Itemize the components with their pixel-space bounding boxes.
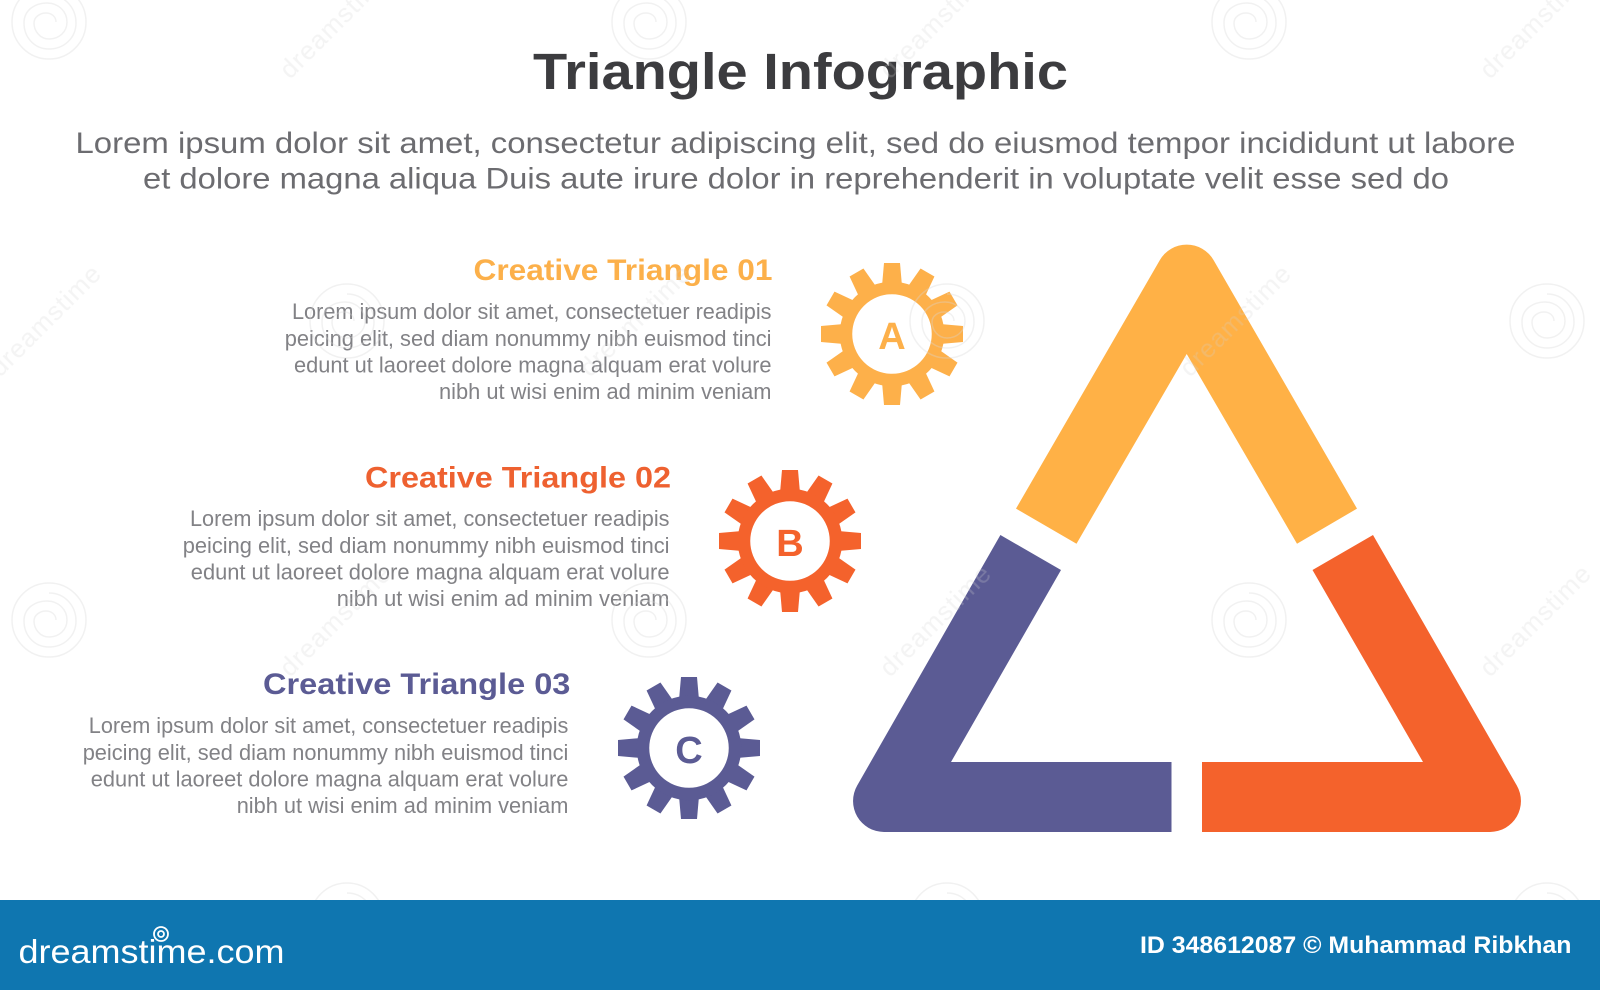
text block: creative triangle 03: Creative Triangle 03 (263, 668, 570, 701)
text block: creative triangle 03: edunt ut laoreet dolore magna alquam erat volure (91, 766, 568, 792)
text block: creative triangle 02 (183, 462, 671, 611)
subtitle text block: et dolore magna aliqua Duis aute irure dolor in reprehenderit in voluptate velit esse sed do (143, 162, 1449, 196)
text block: creative triangle 03: Lorem ipsum dolor sit amet, consectetuer readipis (89, 713, 568, 738)
text block: creative triangle 01: peicing elit, sed diam nonummy nibh euismod tinci (285, 326, 772, 351)
icon: gear C (618, 677, 760, 819)
text: dreamstime (573, 258, 697, 382)
triangle diagram (853, 245, 1521, 832)
text block: creative triangle 01 (285, 254, 772, 404)
subtitle text block (76, 127, 1516, 196)
subtitle text block: Lorem ipsum dolor sit amet, consectetur adipiscing elit, sed do eiusmod tempor incididunt ut labore (76, 127, 1516, 160)
text block: creative triangle 01: edunt ut laoreet dolore magna alquam erat volure (294, 352, 772, 378)
logo icon: spiral (154, 927, 168, 941)
text block: creative triangle 02: Creative Triangle 02 (365, 462, 671, 494)
footer credit: ID 348612087 © Muhammad Ribkhan (1140, 932, 1572, 959)
text block: creative triangle 01: Lorem ipsum dolor sit amet, consectetuer readipis (292, 299, 772, 324)
text block: creative triangle 03: peicing elit, sed diam nonummy nibh euismod tinci (83, 740, 568, 765)
text block: creative triangle 02: edunt ut laoreet dolore magna alquam erat volure (191, 560, 670, 584)
text block: creative triangle 02: nibh ut wisi enim ad minim veniam (337, 586, 670, 611)
text: dreamstime (273, 558, 397, 682)
text block: creative triangle 01: Creative Triangle 01 (474, 254, 772, 287)
text block: creative triangle 02: peicing elit, sed diam nonummy nibh euismod tinci (183, 533, 669, 558)
text block: creative triangle 03: nibh ut wisi enim ad minim veniam (237, 793, 568, 818)
text: dreamstime (873, 558, 997, 682)
footer logo: dreamstime.com (18, 933, 284, 970)
footer bar (0, 900, 1600, 990)
icon: gear B: B (776, 523, 804, 565)
icon: gear A (821, 263, 963, 405)
text block: creative triangle 02: Lorem ipsum dolor sit amet, consectetuer readipis (190, 506, 670, 531)
triangle segment: purple left (853, 535, 1172, 832)
text: dreamstime (1473, 558, 1597, 682)
title: Triangle Infographic (533, 43, 1068, 100)
text block: creative triangle 01: nibh ut wisi enim ad minim veniam (439, 379, 772, 404)
text block: creative triangle 03 (83, 668, 570, 818)
icon: gear C: C (675, 730, 703, 772)
triangle segment: orange right (1202, 535, 1521, 832)
icon: gear B (719, 470, 861, 612)
triangle segment: yellow apex (1016, 245, 1357, 544)
icon: gear A: A (878, 316, 906, 358)
text: dreamstime (1173, 258, 1297, 382)
